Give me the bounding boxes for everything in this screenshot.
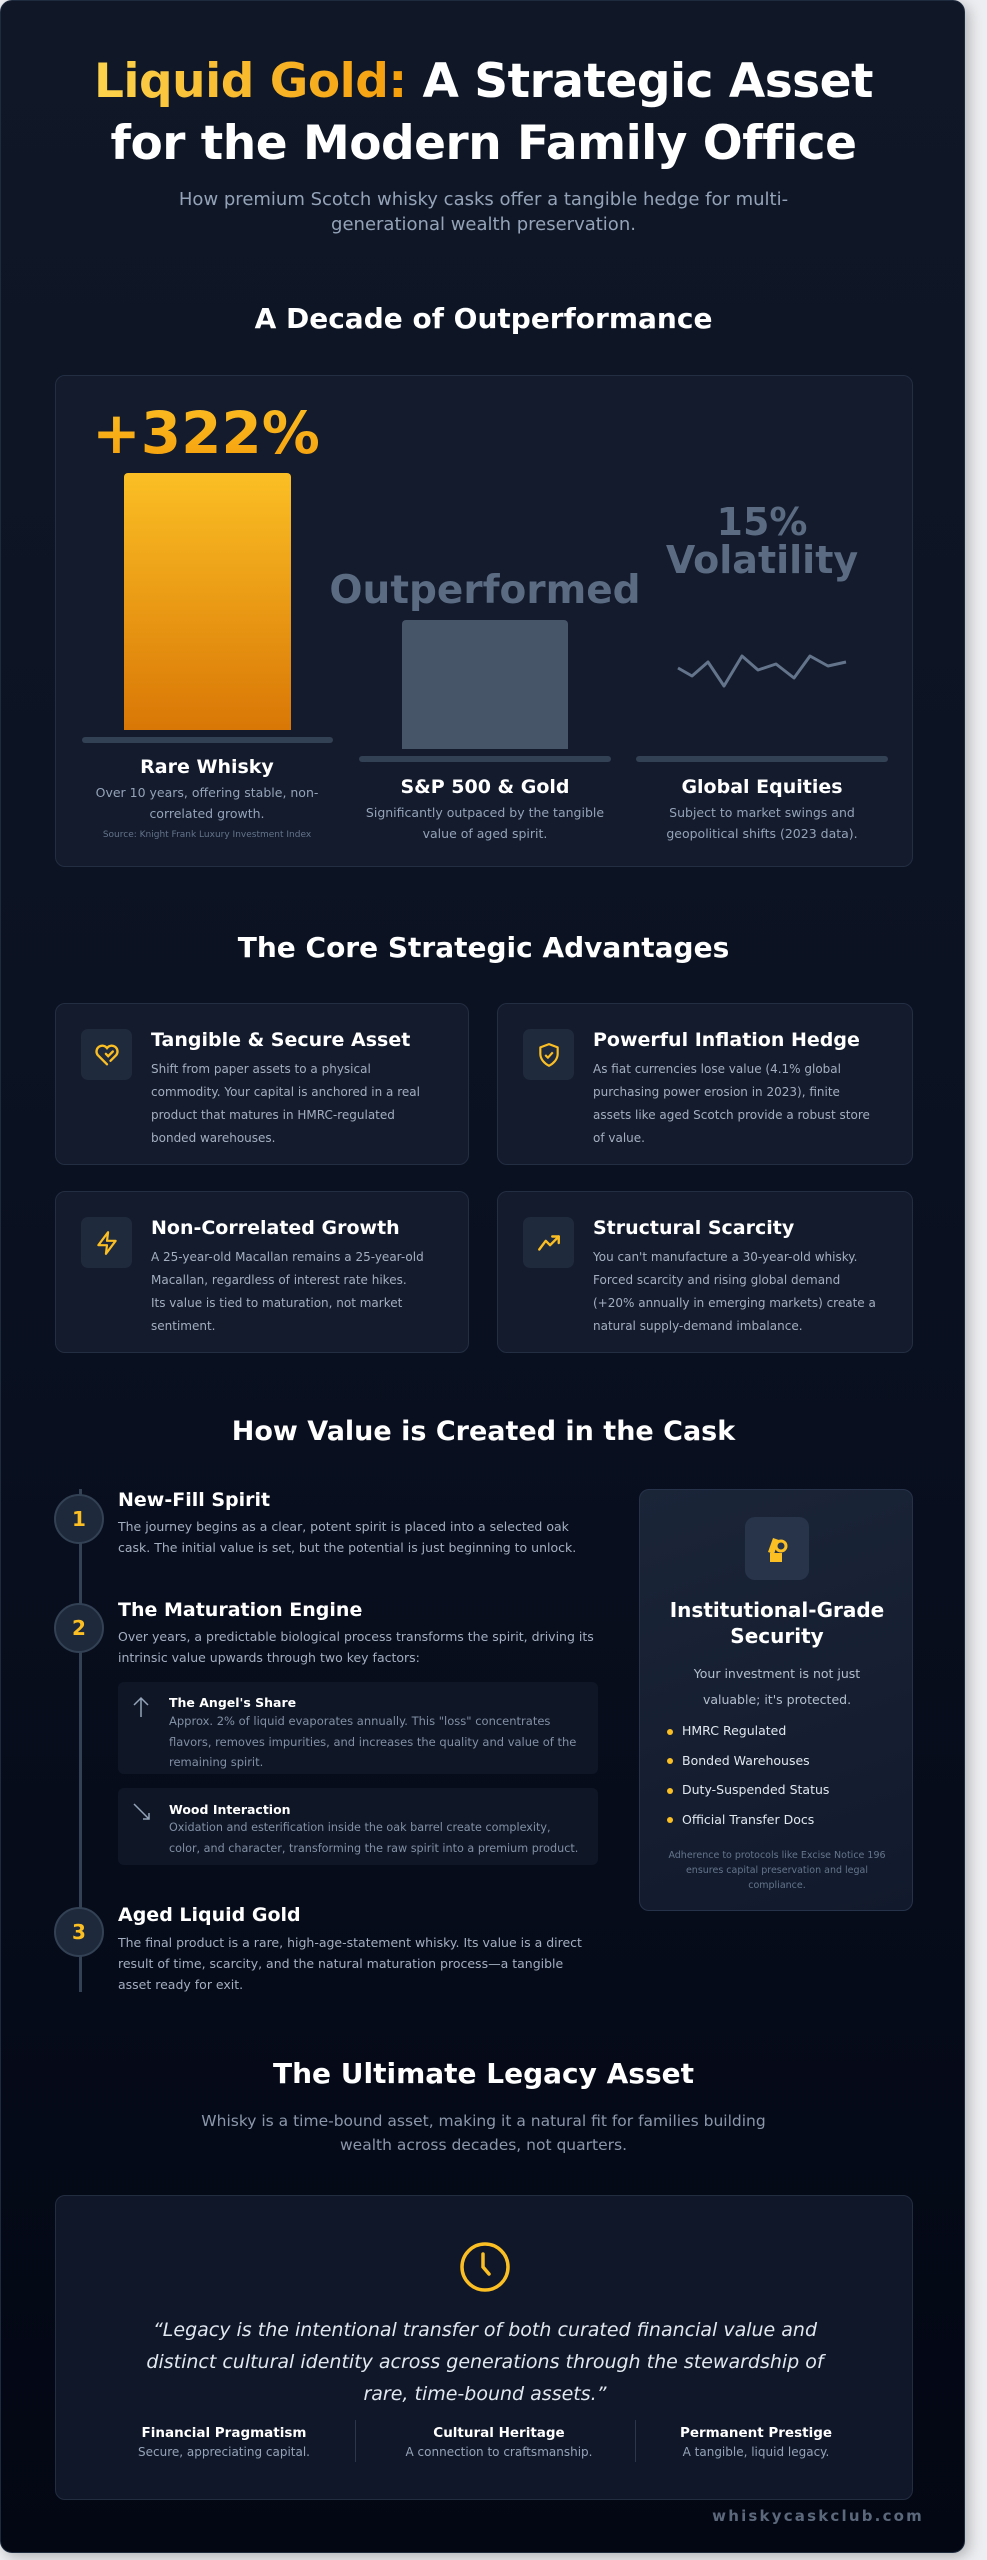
card: non-correlated: Non-Correlated Growth [151, 1217, 400, 1239]
card: tangible [55, 1003, 469, 1165]
card: tangible: Tangible & Secure Asset [151, 1029, 410, 1051]
step 3 [54, 1904, 582, 1992]
label: s&p: S&P 500 & Gold [400, 776, 570, 798]
title: Liquid Gold: A Strategic Asset [94, 54, 873, 109]
stat: volatility [666, 500, 858, 582]
icon: bolt [81, 1217, 132, 1268]
card: inflation [497, 1003, 913, 1165]
security list [667, 1723, 829, 1826]
sub: angel's share [118, 1682, 598, 1774]
security subtitle: Your investment is not just valuable; it's protected. [694, 1666, 860, 1707]
stat: volatility: Volatility [666, 538, 858, 582]
stat: +322%: +322% [92, 399, 320, 467]
quote: “Legacy is the intentional transfer of both curated financial value and distinct cultural identity across generations through the stewardship of rare, time-bound assets.” [146, 2319, 824, 2405]
pillars: Financial Pragmatism [142, 2425, 306, 2441]
card: scarcity: Structural Scarcity [593, 1217, 794, 1239]
security title [670, 1598, 884, 1648]
label: global equities: Subject to market swings and geopolitical shifts (2023 data). [666, 805, 858, 841]
sub: wood interaction: Oxidation and esterification inside the oak barrel create complexity, [169, 1821, 551, 1834]
icon: heart [81, 1029, 132, 1080]
title: for the Modern Family Office [110, 116, 856, 171]
step 3: 3 [72, 1920, 86, 1944]
label: s&p [366, 776, 604, 841]
step 1: New-Fill Spirit [118, 1489, 270, 1511]
security list: Official Transfer Docs [682, 1812, 814, 1826]
security list: HMRC Regulated [682, 1723, 786, 1738]
label: rare whisky: Source: Knight Frank Luxury Investment Index [103, 830, 311, 840]
legacy subtitle: Whisky is a time-bound asset, making it a natural fit for families building wealth across decades, not quarters. [201, 2112, 766, 2154]
stat: volatility: 15% [717, 500, 807, 544]
card: scarcity: (+20% annually in emerging markets) create a natural supply-demand imbalance. [593, 1296, 876, 1333]
step 1: 1 [72, 1507, 86, 1531]
step 3: The final product is a rare, high-age-statement whisky. Its value is a direct result of time, scarcity, and the natural maturation process—a tangible asset ready for exit. [118, 1935, 582, 1992]
step 2: 2 [72, 1616, 86, 1640]
stat: outperformed: Outperformed [329, 568, 641, 613]
label: rare whisky [96, 756, 318, 840]
security list: Duty-Suspended Status [682, 1782, 829, 1797]
security title: Security [730, 1624, 824, 1648]
pillars [138, 2420, 832, 2462]
chart: zigzag [677, 654, 846, 688]
card: non-correlated: A 25-year-old Macallan remains a 25-year-old Macallan, regardless of interest rate hikes. [151, 1250, 424, 1287]
step 1: The journey begins as a clear, potent spirit is placed into a selected oak cask. The initial value is set, but the potential is just beginning to unlock. [118, 1519, 576, 1554]
icon: security [745, 1517, 809, 1580]
security footnote: Adherence to protocols like Excise Notice 196 ensures capital preservation and legal compliance. [668, 1850, 886, 1891]
heading: advantages: The Core Strategic Advantages [238, 931, 729, 964]
panel: security [639, 1489, 913, 1911]
panel: chart [55, 375, 913, 867]
card: scarcity: You can't manufacture a 30-year-old whisky. Forced scarcity and rising global demand [593, 1250, 857, 1287]
pillars: Permanent Prestige [680, 2425, 832, 2441]
bar: s&p [402, 620, 568, 749]
icon: trend [523, 1217, 574, 1268]
sub: wood interaction [118, 1788, 598, 1865]
card: inflation: As fiat currencies lose value (4.1% global purchasing power erosion in 2023), finite assets like aged Scotch provide a robust store of value. [593, 1062, 870, 1145]
card: non-correlated [55, 1191, 469, 1353]
heading: cask: How Value is Created in the Cask [232, 1416, 735, 1447]
label: global equities [666, 776, 858, 841]
heading: decade: A Decade of Outperformance [255, 302, 712, 335]
label: rare whisky: Over 10 years, offering stable, non-correlated growth. [96, 785, 318, 821]
sub: angel's share: Approx. 2% of liquid evaporates annually. This "loss" concentrates flavors, removes impurities, and increases the quality and value of the remaining spirit. [169, 1714, 576, 1769]
icon: shield [523, 1029, 574, 1080]
panel: quote [55, 2195, 913, 2500]
pillars: Secure, appreciating capital. [138, 2445, 310, 2459]
pillars: Cultural Heritage [433, 2425, 565, 2441]
timeline line [79, 1489, 82, 1992]
sub: angel's share: The Angel's Share [169, 1695, 296, 1710]
label: rare whisky: Rare Whisky [140, 756, 274, 778]
subtitle: How premium Scotch whisky casks offer a tangible hedge for multi-generational wealth preservation. [179, 189, 788, 235]
card: tangible: Shift from paper assets to a physical commodity. Your capital is anchored in a real product that matures in HMRC-regulated bonded warehouses. [151, 1062, 420, 1145]
title [94, 54, 873, 171]
card: scarcity [497, 1191, 913, 1353]
step 2 [54, 1599, 598, 1865]
sub: wood interaction: color, and character, transforming the raw spirit into a premium product. [169, 1842, 578, 1854]
bar: rare whisky [124, 473, 291, 730]
footer: site: whiskycaskclub.com [712, 2507, 924, 2525]
step 2: The Maturation Engine [118, 1599, 362, 1621]
sub: wood interaction: Wood Interaction [169, 1802, 291, 1817]
step 3: Aged Liquid Gold [118, 1904, 301, 1926]
icon: clock [460, 2242, 510, 2292]
pillars: A tangible, liquid legacy. [683, 2445, 829, 2459]
security list: Bonded Warehouses [682, 1752, 810, 1768]
step 1 [54, 1489, 576, 1554]
step 2: Over years, a predictable biological process transforms the spirit, driving its intrinsic value upwards through two key factors: [118, 1629, 594, 1664]
heading: legacy: The Ultimate Legacy Asset [273, 2057, 694, 2090]
label: s&p: Significantly outpaced by the tangible value of aged spirit. [366, 805, 604, 841]
label: global equities: Global Equities [681, 776, 843, 798]
card: inflation: Powerful Inflation Hedge [593, 1029, 860, 1051]
pillars: A connection to craftsmanship. [406, 2445, 592, 2459]
card: non-correlated: Its value is tied to maturation, not market sentiment. [151, 1296, 402, 1333]
security title: Institutional-Grade [670, 1598, 884, 1622]
